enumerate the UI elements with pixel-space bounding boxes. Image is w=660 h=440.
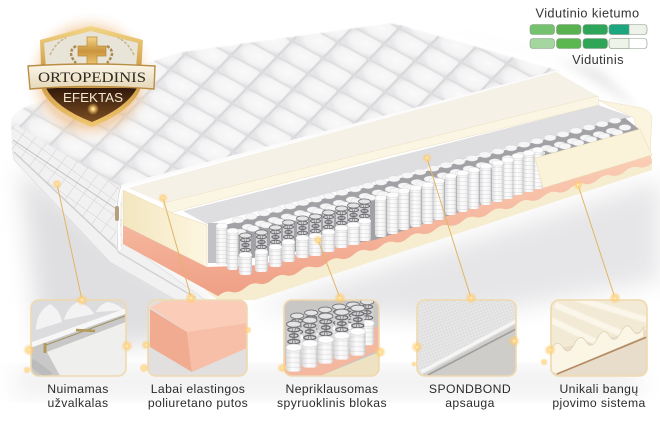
thumbnail: pocket spring block bbox=[284, 299, 379, 376]
gold cross icon bbox=[78, 37, 106, 65]
caption: spondbond: SPONDBOND bbox=[429, 382, 511, 396]
spondbond grey layer bbox=[183, 105, 632, 224]
badge sparkle bbox=[87, 103, 99, 115]
mattress left side panel bbox=[11, 122, 205, 300]
grey side springs bbox=[208, 223, 238, 270]
mattress illustration bbox=[11, 24, 652, 300]
badge subtitle: EFEKTAS bbox=[63, 91, 123, 105]
caption: polyurethane foam: poliuretano putos bbox=[148, 396, 248, 410]
pink polyurethane foam layer bbox=[123, 150, 652, 296]
thumbnail: removable cover bbox=[31, 300, 126, 376]
cream wave foam layer bbox=[205, 158, 652, 300]
caption: spondbond: apsauga bbox=[445, 396, 495, 410]
firmness scale bbox=[530, 6, 647, 67]
quilted mattress top cover bbox=[11, 24, 560, 186]
shield bbox=[40, 26, 143, 127]
ortopedinis efektas badge bbox=[22, 10, 158, 146]
caption: pocket springs: Nepriklausomas bbox=[286, 382, 378, 396]
firmness bar: mattress side one bbox=[530, 24, 647, 34]
pocket springs closed row bbox=[375, 147, 544, 237]
cream comfort lid bbox=[128, 72, 652, 214]
right foam side block bbox=[535, 129, 652, 188]
thumbnail: wave cut foam bbox=[551, 298, 647, 376]
caption: wave cut: Unikali bangų bbox=[559, 382, 639, 396]
laurel wreath bbox=[50, 38, 134, 63]
caption: removable cover: užvalkalas bbox=[48, 396, 108, 410]
left foam side block bbox=[123, 190, 207, 267]
thumbnail: spondbond fabric bbox=[417, 300, 516, 376]
cover flap and zipper bbox=[115, 186, 122, 252]
caption: wave cut: pjovimo sistema bbox=[552, 396, 646, 410]
ribbon with title: ORTOPEDINIS bbox=[38, 70, 146, 86]
thumbnail: polyurethane foam bbox=[148, 300, 247, 376]
open coil springs row bbox=[239, 199, 371, 275]
caption: removable cover: Nuimamas bbox=[47, 382, 109, 396]
firmness value: Vidutinis bbox=[572, 52, 624, 67]
glow points bbox=[23, 153, 621, 374]
cover border bbox=[122, 71, 560, 186]
spring tops back rows bbox=[232, 118, 631, 235]
caption: pocket springs: spyruoklinis blokas bbox=[277, 396, 387, 410]
firmness bar: mattress side two bbox=[530, 38, 647, 48]
spring bed shadow bbox=[225, 118, 640, 260]
gold leader lines bbox=[57, 158, 615, 300]
caption: polyurethane foam: Labai elastingos bbox=[151, 382, 245, 396]
firmness heading: Vidutinio kietumo bbox=[535, 6, 640, 20]
